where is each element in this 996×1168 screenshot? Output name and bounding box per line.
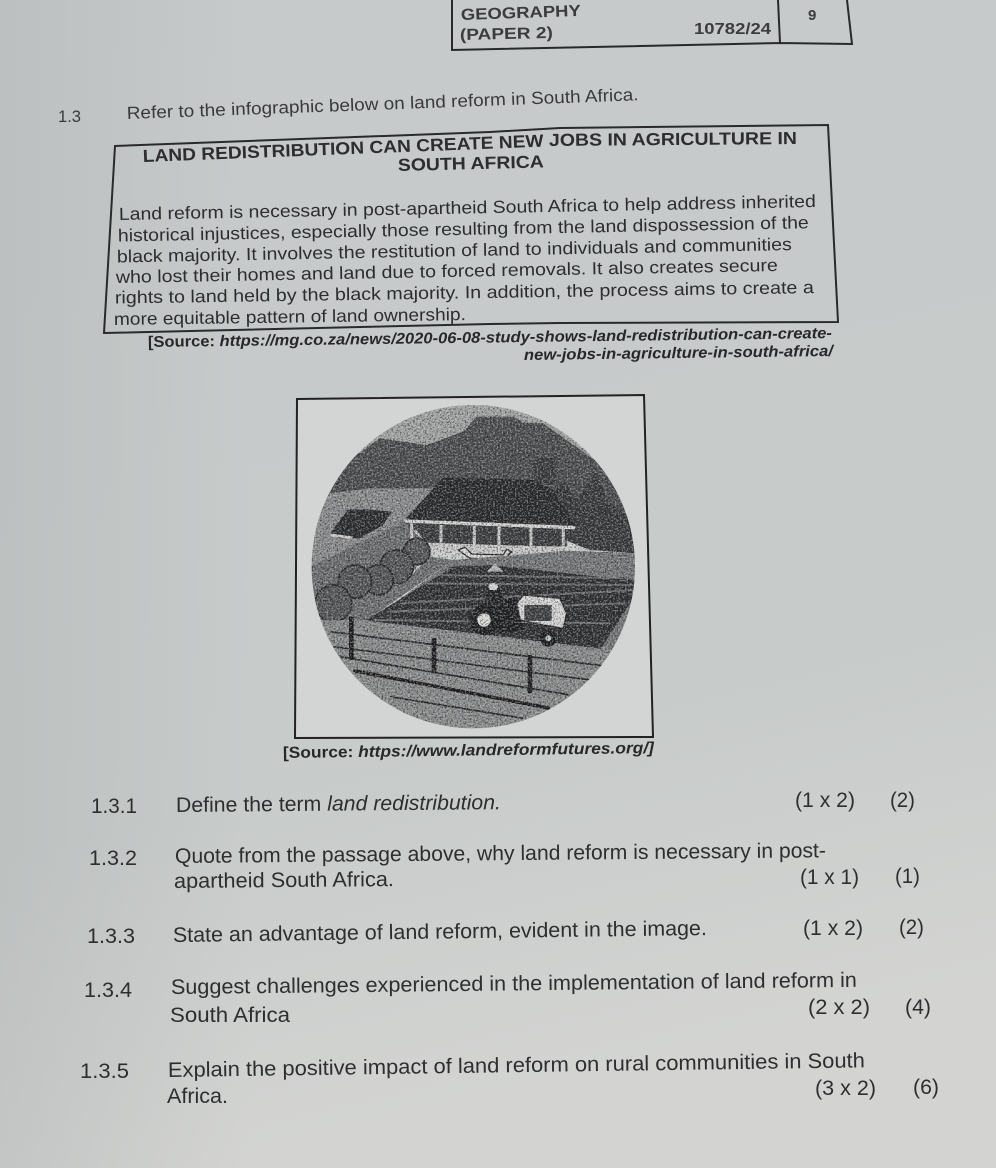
article paragraph: more equitable pattern of land ownership.	[114, 304, 466, 329]
article source: new-jobs-in-agriculture-in-south-africa/	[524, 343, 835, 364]
article paragraph	[114, 191, 816, 329]
chimney	[534, 458, 557, 484]
house roof	[405, 477, 577, 527]
question 1.3.1: (2)	[890, 789, 915, 812]
panel: article extract	[104, 125, 838, 333]
sky	[327, 405, 620, 500]
mountains	[310, 417, 637, 530]
article title: LAND REDISTRIBUTION CAN CREATE NEW	[142, 131, 544, 166]
steps	[458, 547, 512, 560]
fence posts	[351, 617, 530, 693]
field ground	[367, 551, 637, 657]
page header box	[452, 0, 852, 50]
question 1.3.1: 1.3.1	[91, 795, 137, 818]
article paragraph: Land reform is necessary in post-apartheid South Africa to help address inherited	[119, 191, 816, 224]
question 1.3.4: South Africa	[170, 1004, 290, 1027]
article title: SOUTH AFRICA	[398, 151, 544, 175]
question 1.3.1: (1 x 2)	[795, 789, 855, 812]
question 1.3.5: (6)	[913, 1076, 939, 1099]
question 1.3.5: (3 x 2)	[815, 1077, 876, 1100]
foreground pasture	[320, 620, 612, 728]
question 1.3.4: Suggest challenges experienced in the implementation of land reform in	[171, 969, 857, 999]
question 1.3.3	[87, 916, 924, 948]
image source: [Source: https://www.landreformfutures.org/]	[283, 740, 655, 762]
veranda shade	[412, 523, 567, 547]
question 1.3.2: apartheid South Africa.	[174, 868, 394, 893]
question 1.3.5	[80, 1049, 939, 1108]
halftone grain light	[310, 400, 637, 733]
plough furrows	[373, 575, 633, 623]
question 1.3.5: 1.3.5	[80, 1060, 129, 1083]
halftone grain dark	[310, 400, 637, 733]
header page number: 9	[808, 7, 816, 24]
roadside ground	[312, 522, 421, 601]
article source	[148, 325, 835, 364]
question 1.3.1: Define the term land redistribution.	[176, 791, 501, 817]
car bumper	[330, 533, 353, 539]
trees	[315, 538, 430, 622]
road bank	[310, 488, 433, 567]
fence wires	[330, 632, 610, 718]
hedge behind house	[550, 472, 637, 553]
header paper: (PAPER 2)	[460, 25, 553, 44]
article paragraph: rights to land held by the black majority. In addition, the process aims to create a	[115, 277, 814, 307]
veranda roof edge	[404, 519, 575, 529]
header code: 10782/24	[694, 21, 771, 38]
question 1.3.3: (2)	[899, 916, 924, 939]
article title	[142, 128, 797, 175]
question 1.3.4: 1.3.4	[84, 979, 132, 1002]
introduction line: Refer to the infographic below on land reform in South Africa.	[126, 84, 639, 123]
question 1.3.4	[84, 969, 931, 1027]
header subject: GEOGRAPHY	[461, 3, 581, 24]
question 1.3.2: Quote from the passage above, why land reform is necessary in post-	[175, 839, 826, 868]
question 1.3.2: (1)	[895, 865, 920, 888]
question 1.3.4: (4)	[905, 996, 931, 1019]
article paragraph: black majority. It involves the restitution of land to individuals and communities	[117, 234, 792, 266]
question 1.3.1	[91, 789, 915, 818]
article source: [Source: https://mg.co.za/news/2020-06-08-study-shows-land-redistribution-can-create-	[148, 325, 832, 351]
image frame	[295, 395, 653, 738]
left meadow	[310, 557, 453, 633]
tractor	[470, 563, 567, 647]
question 1.3.5: Explain the positive impact of land reform on rural communities in South	[168, 1049, 865, 1082]
article title: JOBS IN AGRICULTURE IN	[549, 128, 797, 150]
ploughed field	[365, 565, 637, 650]
car	[330, 509, 392, 538]
illustration: farm with tractor	[310, 400, 637, 733]
question 1.3.5: Africa.	[167, 1085, 228, 1108]
question 1.3.2: 1.3.2	[89, 847, 137, 870]
question number 1.3: 1.3	[58, 108, 81, 126]
question 1.3.2: (1 x 1)	[800, 866, 859, 889]
veranda floor	[428, 542, 522, 547]
article paragraph: who lost their homes and land due to forced removals. It also creates secure	[115, 255, 778, 287]
question 1.3.3: 1.3.3	[87, 925, 135, 948]
article paragraph: historical injustices, especially those resulting from the land dispossession of the	[118, 212, 809, 245]
pillars	[410, 523, 565, 547]
question 1.3.2	[89, 839, 920, 893]
question 1.3.3: (1 x 2)	[803, 917, 863, 940]
question 1.3.4: (2 x 2)	[808, 996, 870, 1019]
question 1.3.3: State an advantage of land reform, evident in the image.	[173, 917, 707, 947]
